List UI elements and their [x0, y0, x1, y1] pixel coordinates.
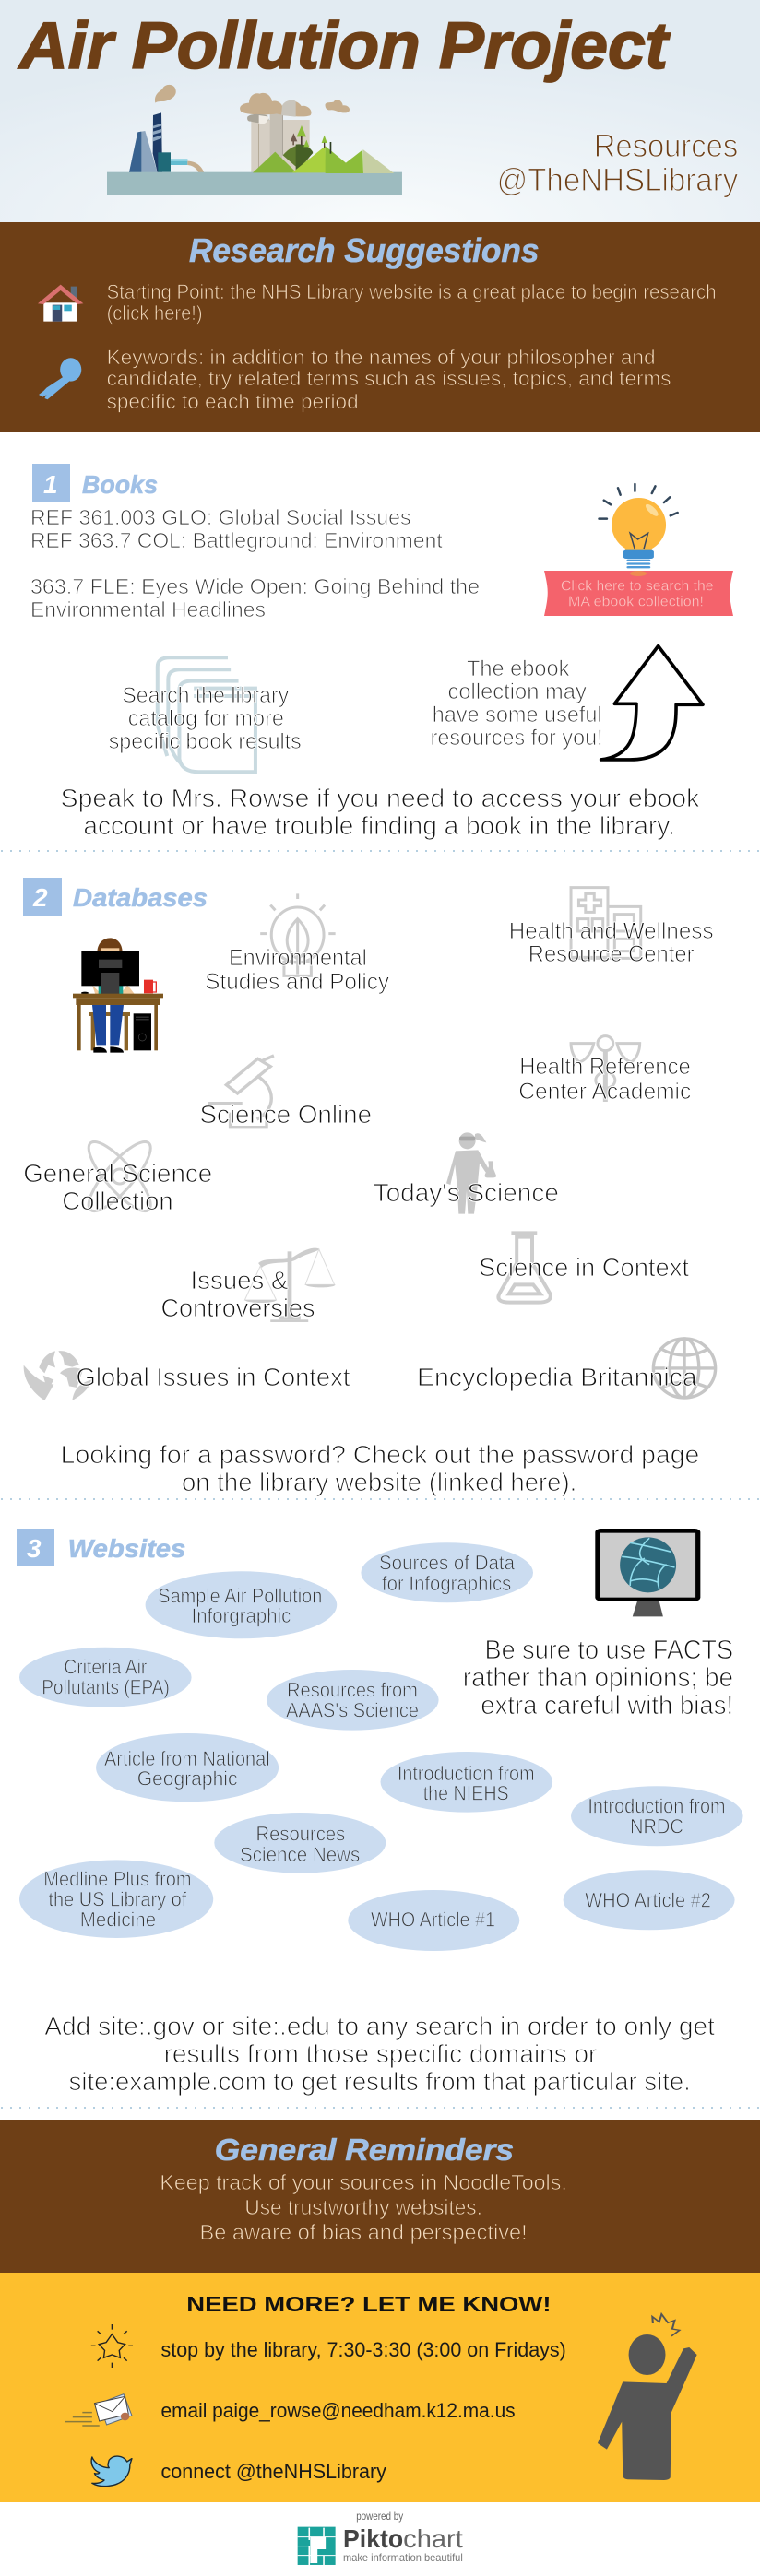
bubble: WHO article 1	[348, 1890, 519, 1951]
bubble: science news: Science News	[240, 1843, 360, 1866]
text: use facts: extra careful with bias!	[481, 1691, 733, 1720]
text: password note	[61, 1440, 699, 1496]
wordmark: make information beautiful	[343, 2551, 463, 2564]
bubble: criteria air pollutants: Criteria Air	[64, 1656, 147, 1679]
heading: databases	[23, 878, 208, 916]
text: password note: Looking for a password? Check out the password page	[61, 1440, 699, 1469]
bubble: sources of data: for Infographics	[382, 1572, 511, 1595]
logo: piktochart mark	[298, 2527, 336, 2565]
icon: person raising hand	[598, 2314, 697, 2480]
bubble: science news: Resources	[256, 1823, 345, 1846]
ribbon: ebook collection link: MA ebook collection!	[568, 595, 704, 610]
text: search the catalog: specific book results	[109, 729, 302, 754]
text: site search tip: Add site:.gov or site:.edu to any search in order to only get	[44, 2012, 715, 2040]
text: ebook collection note: have some useful	[433, 703, 602, 727]
panel: contact	[0, 2273, 760, 2502]
text: environmental studies: Studies and Policy	[205, 969, 389, 995]
text: health and wellness: Health and Wellness	[509, 918, 714, 944]
heading: databases: Databases	[73, 883, 208, 912]
subtitle	[497, 128, 739, 198]
text: search the catalog: Search the library	[122, 683, 289, 708]
text: speak to Mrs. Rowse	[61, 784, 700, 840]
text: starting point: Starting Point: the NHS Library website is a great place to begin research	[107, 280, 717, 303]
bubble: NIEHS: Introduction from	[398, 1762, 535, 1785]
heading: websites: 3	[27, 1534, 42, 1563]
text: ebook collection note: resources for you!	[431, 726, 603, 750]
text: ebook collection note: collection may	[448, 679, 587, 704]
heading: need more: NEED MORE? LET ME KNOW!	[186, 2292, 552, 2316]
text: issues and controversies	[160, 1266, 315, 1322]
text: book call numbers: 363.7 FLE: Eyes Wide Open: Going Behind the	[30, 574, 480, 598]
bubble: NRDC: Introduction from	[588, 1795, 726, 1818]
bubble: national geographic: Geographic	[137, 1767, 238, 1790]
footer: piktochart credit	[298, 2510, 463, 2565]
icon: star	[91, 2324, 133, 2368]
icon: monitor with globe	[595, 1529, 700, 1616]
text: book call numbers: REF 361.003 GLO: Global Social Issues	[30, 505, 411, 529]
icon: scales	[244, 1248, 336, 1322]
ribbon: ebook collection link: Click here to search the	[561, 579, 714, 595]
text: keywords: specific to each time period	[107, 390, 359, 413]
bubble: medline plus: Medicine	[80, 1908, 156, 1931]
text: search the catalog	[109, 683, 302, 754]
text: environmental studies: Environmental	[229, 945, 367, 971]
text: book call numbers	[30, 505, 480, 621]
icon: microscope	[208, 1056, 274, 1128]
text: book call numbers: REF 363.7 COL: Battleground: Environment	[30, 528, 443, 552]
bubble: NIEHS: the NIEHS	[423, 1782, 509, 1805]
heading: databases: 2	[32, 883, 48, 912]
text: site search tip: site:example.com to get results from that particular site.	[69, 2067, 691, 2096]
text: connect: connect @theNHSLibrary	[160, 2460, 386, 2483]
text: general science	[23, 1159, 212, 1215]
bubble: WHO article 1: WHO Article #1	[371, 1908, 495, 1931]
text: site search tip: results from those specific domains or	[164, 2039, 597, 2068]
text: password note: on the library website (linked here).	[182, 1468, 576, 1496]
panel: header	[0, 0, 760, 222]
text: health reference: Health Reference	[519, 1054, 691, 1080]
wordmark	[343, 2524, 463, 2564]
bubble: criteria air pollutants: Pollutants (EPA)	[42, 1676, 170, 1699]
text: global issues in context: Global Issues in Context	[76, 1363, 350, 1391]
panel: websites	[17, 1529, 743, 2096]
text: email: email paige_rowse@needham.k12.ma.us	[160, 2399, 516, 2422]
panel: general reminders	[0, 2120, 760, 2273]
bubble: AAAS resources	[267, 1670, 439, 1731]
bubble: NIEHS	[380, 1752, 552, 1813]
panel: databases	[23, 878, 716, 1496]
bubble: AAAS resources: Resources from	[287, 1679, 418, 1702]
icon: stacked pages	[158, 657, 255, 772]
text: health and wellness	[509, 918, 714, 967]
panel: books	[30, 464, 733, 840]
icon: hospital	[571, 888, 641, 958]
text: book call numbers: Environmental Headlines	[30, 597, 266, 621]
text: today's science: Today's Science	[374, 1178, 559, 1207]
bubble: sources of data	[361, 1542, 533, 1602]
text: science online: Science Online	[199, 1100, 372, 1128]
heading: books	[32, 464, 158, 502]
text: use facts	[463, 1636, 733, 1720]
text: reminders list: Be aware of bias and perspective!	[199, 2220, 528, 2244]
text: keywords	[107, 346, 671, 413]
icon: environmental bulb	[260, 893, 336, 975]
bubble: medline plus: the US Library of	[48, 1888, 187, 1911]
heading: research suggestions: Research Suggestions	[189, 231, 539, 269]
bubble: WHO article 2: WHO Article #2	[585, 1888, 711, 1911]
bubble: NRDC: NRDC	[630, 1814, 683, 1837]
icon: envelope	[65, 2394, 132, 2426]
heading: general reminders: General Reminders	[215, 2133, 514, 2167]
text: health reference: Center Academic	[518, 1079, 691, 1105]
bubble: medline plus	[19, 1860, 213, 1938]
wordmark: Pikto	[343, 2524, 403, 2553]
ribbon: ebook collection link	[544, 571, 733, 616]
icon: globe in hands	[24, 1351, 91, 1400]
text: general science: General Science	[23, 1159, 212, 1188]
heading: websites	[17, 1529, 185, 1566]
text: reminders list: Use trustworthy websites.	[244, 2195, 482, 2219]
text: ebook collection note: The ebook	[467, 656, 570, 681]
wordmark: chart	[403, 2524, 463, 2553]
text: reminders list	[160, 2170, 567, 2244]
bubble: sources of data: Sources of Data	[379, 1552, 516, 1575]
text: issues and controversies: Issues &	[190, 1266, 289, 1294]
text: powered by: powered by	[356, 2510, 403, 2523]
icon: twitter bird	[91, 2456, 132, 2487]
icon: globe	[653, 1339, 716, 1398]
subtitle: @TheNHSLibrary	[497, 162, 739, 198]
text: starting point: (click here!)	[107, 301, 203, 325]
text: reminders list: Keep track of your sources in NoodleTools.	[160, 2170, 567, 2194]
icon: flask	[498, 1233, 551, 1303]
bubble: medline plus: Medline Plus from	[43, 1868, 192, 1891]
heading: books: 1	[43, 470, 58, 499]
panel: research suggestions	[0, 222, 760, 432]
text: speak to Mrs. Rowse: account or have trouble finding a book in the library.	[83, 811, 675, 840]
text: health and wellness: Resource Center	[528, 941, 694, 967]
text: ebook collection note	[431, 656, 603, 750]
text: science in context: Science in Context	[479, 1253, 689, 1282]
bubble: sample infographic: Inforgraphic	[192, 1604, 291, 1627]
icon: house	[38, 285, 83, 322]
bubble: criteria air pollutants	[19, 1648, 192, 1707]
text: use facts: rather than opinions; be	[463, 1663, 733, 1693]
text: stop by the library: stop by the library, 7:30-3:30 (3:00 on Fridays)	[160, 2338, 566, 2361]
icon: key	[39, 358, 81, 399]
text: environmental studies	[205, 945, 389, 995]
illustration: factory polluting landscape	[107, 85, 402, 195]
text: site search tip	[44, 2012, 715, 2096]
bubble: AAAS resources: AAAS's Science	[286, 1699, 419, 1722]
text: general science: Collection	[62, 1187, 173, 1215]
text: keywords: candidate, try related terms such as issues, topics, and terms	[107, 367, 671, 390]
icon: atom	[80, 1134, 160, 1219]
text: starting point	[107, 280, 717, 325]
title: Air Pollution Project	[18, 10, 671, 83]
heading: books: Books	[82, 470, 158, 499]
arrow: up to ebook link	[601, 646, 703, 760]
text: speak to Mrs. Rowse: Speak to Mrs. Rowse if you need to access your ebook	[61, 784, 700, 812]
bubble: sample infographic	[146, 1571, 337, 1638]
heading: websites: Websites	[68, 1534, 185, 1563]
text: encyclopedia britannica: Encyclopedia Britannica	[417, 1363, 697, 1391]
text: health reference	[518, 1054, 691, 1105]
bubble: national geographic	[96, 1733, 279, 1802]
bubble: sample infographic: Sample Air Pollution	[158, 1584, 322, 1607]
bubble: NRDC	[571, 1786, 743, 1846]
icon: scientist	[446, 1132, 496, 1214]
icon: caduceus	[571, 1036, 640, 1102]
bubble: science news	[214, 1813, 386, 1873]
icon: person at desk	[73, 938, 163, 1053]
icon: light bulb	[600, 484, 678, 568]
bubble: WHO article 2	[564, 1870, 735, 1930]
text: keywords: Keywords: in addition to the names of your philosopher and	[107, 346, 656, 369]
text: issues and controversies: Controversies	[160, 1294, 315, 1322]
bubble: national geographic: Article from National	[104, 1747, 270, 1770]
text: search the catalog: catalog for more	[128, 706, 284, 731]
text: use facts: Be sure to use FACTS	[485, 1636, 733, 1665]
subtitle: Resources	[594, 128, 738, 164]
